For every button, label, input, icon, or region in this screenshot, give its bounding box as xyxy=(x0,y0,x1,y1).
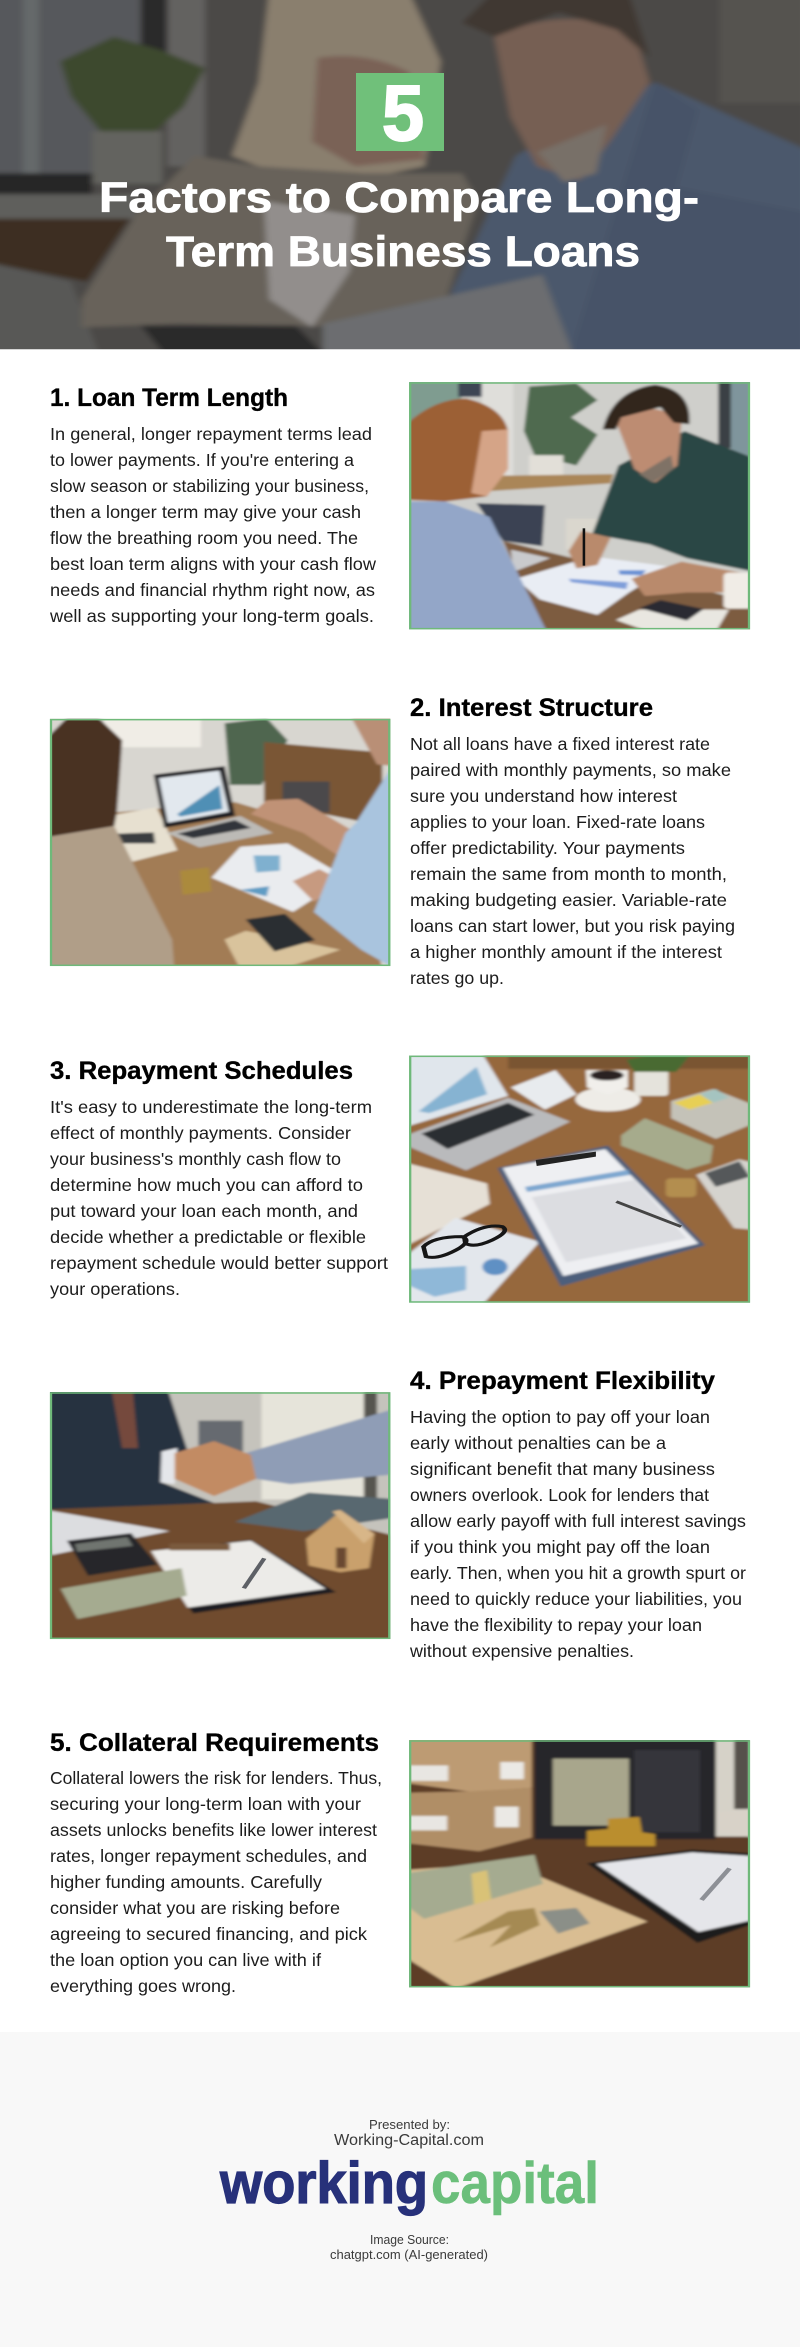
photo 1: woman and man reviewing a chart xyxy=(404,378,755,633)
text block 2: offer predictability. Your payments xyxy=(410,838,685,858)
text block 3: decide whether a predictable or flexible xyxy=(50,1227,366,1247)
number badge: 5 xyxy=(382,68,424,157)
text block 5: everything goes wrong. xyxy=(50,1976,236,1996)
text block 5: consider what you are risking before xyxy=(50,1898,340,1918)
text block 2: paired with monthly payments, so make xyxy=(410,760,731,780)
section 2: interest structure xyxy=(41,694,735,988)
text block 4: need to quickly reduce your liabilities, you xyxy=(410,1589,742,1609)
image source: Image Source: xyxy=(370,2232,449,2247)
text block 5: agreeing to secured financing, and pick xyxy=(50,1924,367,1944)
text block 3: your operations. xyxy=(50,1279,180,1299)
text block 3 xyxy=(50,1097,388,1299)
title: Term Business Loans xyxy=(166,228,640,276)
text block 3: put toward your loan each month, and xyxy=(50,1201,358,1221)
text block 5: assets unlocks benefits like lower interest xyxy=(50,1820,377,1840)
photo 2: laptop with chart on a desk xyxy=(41,715,395,974)
photo 3 border xyxy=(410,1056,749,1302)
logo: workingcapital xyxy=(219,2151,599,2216)
heading 2: 2. Interest Structure xyxy=(410,694,653,722)
text block 4 xyxy=(409,1407,746,1661)
presented by xyxy=(334,2117,484,2149)
logo: workingcapital: working xyxy=(219,2151,428,2216)
text block 5: the loan option you can live with if xyxy=(50,1950,321,1970)
image source xyxy=(330,2232,488,2262)
text block 5: securing your long-term loan with your xyxy=(50,1794,361,1814)
photo 2 border xyxy=(51,720,389,965)
presented by: Working-Capital.com xyxy=(334,2132,484,2149)
section 1: loan term length xyxy=(49,378,755,633)
text block 2: Not all loans have a fixed interest rate xyxy=(410,734,710,754)
text block 5: rates, longer repayment schedules, and xyxy=(50,1846,367,1866)
text block 4: without expensive penalties. xyxy=(409,1641,634,1661)
text block 2: applies to your loan. Fixed-rate loans xyxy=(410,812,705,832)
text block 4: allow early payoff with full interest savings xyxy=(410,1511,746,1531)
text block 2: sure you understand how interest xyxy=(410,786,677,806)
text block 2: making budgeting easier. Variable-rate xyxy=(410,890,727,910)
text block 4: Having the option to pay off your loan xyxy=(410,1407,710,1427)
heading 1: 1. Loan Term Length xyxy=(50,384,288,412)
title: Factors to Compare Long- xyxy=(99,174,699,222)
heading 4: 4. Prepayment Flexibility xyxy=(410,1367,715,1395)
section 5: collateral requirements xyxy=(50,1729,758,1996)
text block 3: repayment schedule would better support xyxy=(50,1253,388,1273)
text block 4: early without penalties can be a xyxy=(410,1433,666,1453)
heading 5: 5. Collateral Requirements xyxy=(50,1729,379,1757)
text block 5: higher funding amounts. Carefully xyxy=(50,1872,322,1892)
text block 3: effect of monthly payments. Consider xyxy=(50,1123,351,1143)
section 3: repayment schedules xyxy=(50,1052,755,1306)
text block 2: loans can start lower, but you risk paying xyxy=(410,916,735,936)
text block 4: have the flexibility to repay your loan xyxy=(410,1615,702,1635)
text block 1: to lower payments. If you're entering a xyxy=(50,450,354,470)
presented by: Presented by: xyxy=(369,2117,450,2132)
text block 5 xyxy=(50,1768,382,1996)
photo 3: repayment schedule clipboard on a desk xyxy=(404,1052,755,1306)
text block 3: It's easy to underestimate the long-term xyxy=(50,1097,372,1117)
text block 1: best loan term aligns with your cash flow xyxy=(50,554,376,574)
text block 4: significant benefit that many business xyxy=(410,1459,715,1479)
text block 1: flow the breathing room you need. The xyxy=(50,528,358,548)
text block 3: your business's monthly cash flow to xyxy=(50,1149,341,1169)
number badge xyxy=(356,68,444,157)
text block 2: rates go up. xyxy=(410,968,504,988)
text block 1: then a longer term may give your cash xyxy=(50,502,361,522)
photo 5: keys, cash, safe and boxes xyxy=(403,1736,758,1991)
photo 1 border xyxy=(410,383,749,629)
text block 1: In general, longer repayment terms lead xyxy=(50,424,372,444)
photo 5 border xyxy=(410,1741,749,1987)
photo 4: handshake over a desk with model house xyxy=(41,1386,401,1645)
text block 1 xyxy=(49,424,376,626)
footer panel xyxy=(0,2032,800,2347)
header photo: two colleagues reviewing documents xyxy=(0,0,800,358)
image source: chatgpt.com (AI-generated) xyxy=(330,2247,488,2262)
text block 3: determine how much you can afford to xyxy=(50,1175,363,1195)
text block 1: slow season or stabilizing your business, xyxy=(50,476,369,496)
text block 4: if you think you might pay off the loan xyxy=(410,1537,710,1557)
text block 2 xyxy=(410,734,735,988)
photo 4 border xyxy=(51,1393,389,1638)
text block 5: Collateral lowers the risk for lenders. Thus, xyxy=(50,1768,382,1788)
title xyxy=(99,174,699,276)
section 4: prepayment flexibility xyxy=(41,1367,746,1661)
text block 2: a higher monthly amount if the interest xyxy=(410,942,722,962)
text block 1: well as supporting your long-term goals. xyxy=(49,606,374,626)
text block 2: remain the same from month to month, xyxy=(410,864,727,884)
header banner xyxy=(0,0,800,358)
heading 3: 3. Repayment Schedules xyxy=(50,1057,353,1085)
logo: workingcapital: capital xyxy=(431,2151,599,2216)
text block 4: owners overlook. Look for lenders that xyxy=(410,1485,709,1505)
text block 1: needs and financial rhythm right now, as xyxy=(50,580,375,600)
text block 4: early. Then, when you hit a growth spurt or xyxy=(410,1563,746,1583)
